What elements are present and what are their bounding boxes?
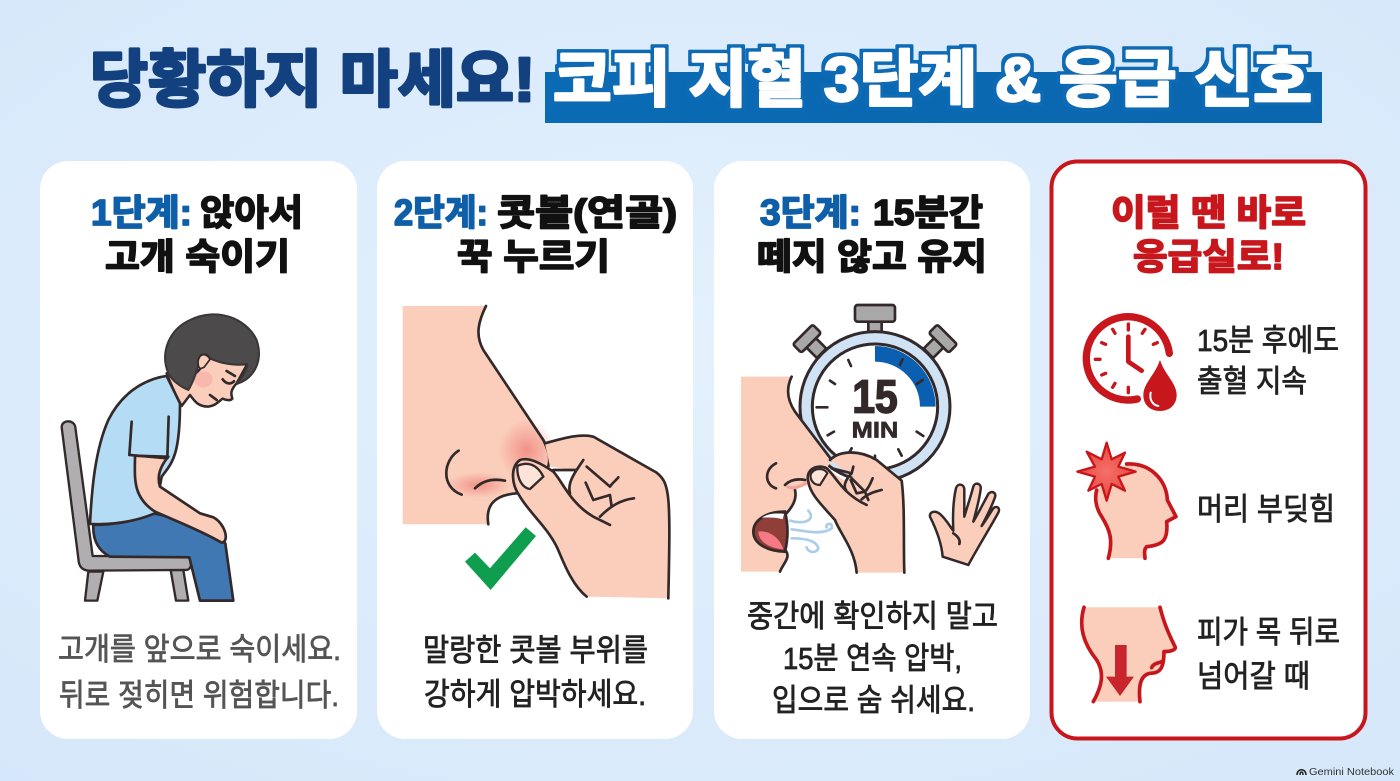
illustration: seated person leaning forward <box>62 314 259 601</box>
watermark: Gemini Notebook <box>1309 766 1395 778</box>
sign 1 text: 15분 후에도 <box>1197 323 1339 358</box>
step 3 heading: 떼지 않고 유지 <box>757 236 987 277</box>
step 2 description: 강하게 압박하세요. <box>424 677 646 712</box>
step 1 heading: 고개 숙이기 <box>105 236 290 277</box>
icon: clock with blood drop <box>1086 317 1177 411</box>
chair <box>62 421 191 601</box>
title: highlighted part: 코피 지혈 3단계 & 응급 신호 <box>553 46 1312 115</box>
title <box>90 46 1322 123</box>
check mark <box>465 527 536 590</box>
sign 2 text: 머리 부딪힘 <box>1197 492 1335 527</box>
step 1 description: 고개를 앞으로 숙이세요. <box>58 632 341 667</box>
shirt <box>90 376 180 524</box>
cheek blush <box>194 371 213 387</box>
emergency heading: 응급실로! <box>1133 236 1284 277</box>
illustration: pinching the nose <box>403 306 669 598</box>
thumbnail <box>517 464 543 489</box>
title: blue band <box>545 72 1322 123</box>
card 3 background <box>714 161 1030 739</box>
step 1 heading: 1단계: <box>91 192 192 233</box>
step 3 description: 15분 연속 압박, <box>783 641 962 676</box>
step 2 heading: 콧볼(연골) <box>497 192 677 233</box>
step 1 description: 뒤로 젖히면 위험합니다. <box>59 678 339 713</box>
sign 3 text: 넘어갈 때 <box>1197 659 1310 694</box>
step 3 description: 입으로 숨 쉬세요. <box>772 683 975 718</box>
hand <box>513 436 669 598</box>
trousers <box>93 513 233 601</box>
title: dark part: 당황하지 마세요! <box>90 46 535 115</box>
step 3 heading <box>757 192 987 277</box>
nose <box>403 306 549 524</box>
icon: head impact <box>1077 443 1176 558</box>
card 2 background <box>377 161 693 739</box>
step 1 heading <box>91 192 303 277</box>
step 2 description: 말랑한 콧볼 부위를 <box>423 633 648 668</box>
icon: throat with down arrow <box>1082 607 1175 702</box>
step 3 description <box>747 599 998 718</box>
step 2 heading <box>394 192 677 277</box>
panel: emergency signs <box>1052 162 1366 738</box>
sign 1 text: 출혈 지속 <box>1197 364 1307 399</box>
card 4 background <box>1052 162 1366 738</box>
face details <box>210 371 235 400</box>
open mouth <box>753 512 787 552</box>
step 2 heading: 꾹 누르기 <box>457 236 610 277</box>
card 1 background <box>40 161 357 739</box>
pinching hand <box>808 452 904 573</box>
step 2 description <box>423 633 648 712</box>
panel: step 1 <box>40 161 357 739</box>
face outline <box>767 377 832 572</box>
sign 3 text: 피가 목 뒤로 <box>1197 615 1340 650</box>
arm <box>135 456 226 543</box>
step 3 description: 중간에 확인하지 말고 <box>747 599 998 634</box>
redness <box>498 420 555 480</box>
panel: step 3 <box>714 161 1030 739</box>
panel: step 2 <box>377 161 693 739</box>
step 1 heading: 앉아서 <box>200 192 303 233</box>
sleeve lines <box>129 417 169 458</box>
breath lines <box>790 511 832 552</box>
hair <box>165 314 259 390</box>
sign 3 text <box>1197 615 1340 694</box>
stopwatch <box>793 305 957 482</box>
sign 1 text <box>1197 323 1339 399</box>
step 2 heading: 2단계: <box>394 192 488 233</box>
raised open hand <box>930 484 999 565</box>
ear <box>198 355 210 368</box>
step 1 description <box>58 632 341 713</box>
neck and face <box>167 358 247 407</box>
face <box>741 377 832 572</box>
nose outline <box>446 306 549 524</box>
emergency heading <box>1111 192 1306 277</box>
stopwatch: MIN <box>852 418 898 443</box>
step 3 heading: 3단계: <box>760 192 861 233</box>
illustration: stopwatch with pinched nose <box>741 305 999 573</box>
stopwatch: 15 <box>852 371 898 423</box>
step 3 heading: 15분간 <box>873 192 983 233</box>
emergency heading: 이럴 땐 바로 <box>1111 192 1306 233</box>
